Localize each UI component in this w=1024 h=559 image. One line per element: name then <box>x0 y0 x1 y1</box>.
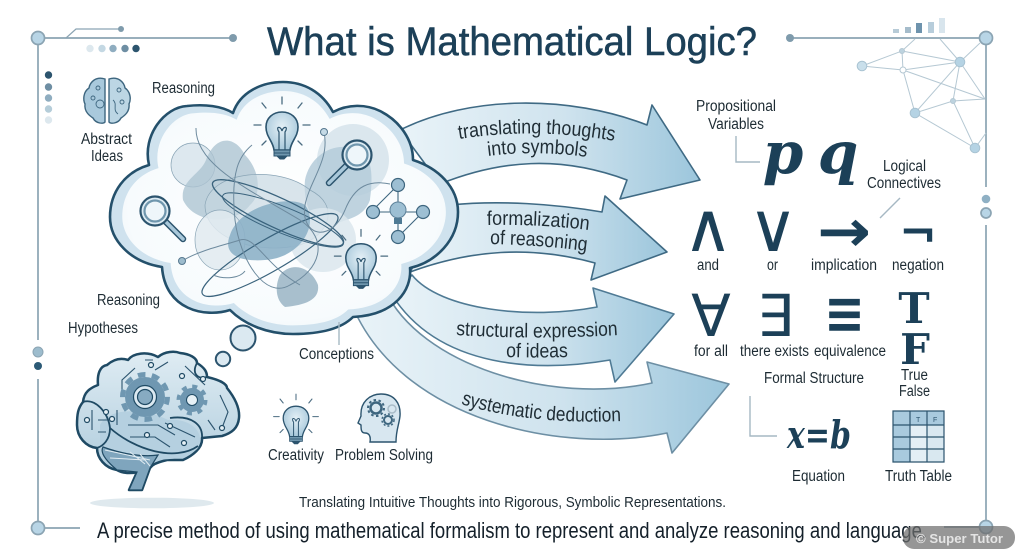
formal structure symbols: ∃ <box>757 282 793 350</box>
decorative bars <box>893 18 945 33</box>
formal structure symbols: Formal Structure <box>764 370 864 387</box>
true and false <box>898 284 930 400</box>
icon: lightbulb lower <box>334 230 388 288</box>
arrow: systematic deduction: systematic deduction <box>462 394 620 422</box>
arrow: formalization of reasoning: of reasoning <box>490 230 587 254</box>
icon: head with gears, problem solving <box>358 394 400 442</box>
cloud labels: Abstract <box>81 131 133 148</box>
icon: lightbulb top <box>254 97 310 159</box>
arrow: formalization of reasoning: formalization <box>487 210 589 230</box>
formal structure symbols <box>691 279 886 387</box>
leader lines <box>339 136 900 436</box>
icon: small brain, abstract ideas <box>84 78 130 123</box>
thought bubbles <box>216 326 256 366</box>
cloud labels: Problem Solving <box>335 447 433 464</box>
network graph <box>857 39 986 153</box>
formal structure symbols: equivalence <box>814 343 886 360</box>
cloud labels: Reasoning <box>152 80 215 97</box>
arrow: translating thoughts into symbols <box>402 102 701 200</box>
cloud labels <box>68 80 433 464</box>
true and false: False <box>899 383 930 400</box>
propositional variables <box>696 98 858 187</box>
logical connectives: Logical <box>883 158 926 175</box>
true and false: T <box>898 284 930 333</box>
logical connectives: implication <box>811 257 877 274</box>
frame: right and top border with nodes <box>786 32 992 534</box>
arrow: translating thoughts into symbols: translating thoughts <box>458 119 615 141</box>
logical connectives: Connectives <box>867 175 941 192</box>
true and false: True <box>901 367 928 384</box>
abstract blobs <box>171 124 389 307</box>
propositional variables: Propositional <box>696 98 776 115</box>
subtitle: Translating Intuitive Thoughts into Rigorous, Symbolic Representations. <box>299 494 726 511</box>
logical connectives: or <box>767 257 778 274</box>
formal structure symbols: there exists <box>740 343 809 360</box>
propositional variables: q <box>818 119 858 187</box>
icon: lightbulb, creativity <box>274 394 318 444</box>
frame: left and top border with nodes <box>32 26 237 534</box>
cloud labels: Ideas <box>91 148 123 165</box>
truth table: Truth Table <box>885 468 952 485</box>
truth table <box>885 411 952 485</box>
arrow: systematic deduction <box>357 304 730 454</box>
logical connectives: → <box>817 197 871 265</box>
arrow: translating thoughts into symbols: into symbols <box>488 139 587 158</box>
icon: network with bulb <box>366 178 430 244</box>
arrow: structural expression of ideas: structural expression <box>456 322 617 342</box>
propositional variables: p <box>763 119 803 187</box>
logical connectives: negation <box>892 257 944 274</box>
decorative dot column <box>45 71 52 124</box>
truth table: F <box>933 417 937 424</box>
arrow: formalization of reasoning <box>411 195 668 281</box>
logical connectives: ∧ <box>683 189 733 268</box>
formal structure symbols: ∀ <box>691 282 731 350</box>
brain shadow <box>90 498 214 508</box>
equation <box>786 412 851 485</box>
cloud labels: Creativity <box>268 447 324 464</box>
watermark: © Super Tutor <box>916 531 1003 546</box>
cloud labels: Hypotheses <box>68 320 138 337</box>
formal structure symbols: ≡ <box>824 279 865 347</box>
truth table: T <box>916 417 921 424</box>
gear small <box>178 386 206 414</box>
icon: magnifier left <box>140 196 183 239</box>
logical connectives: ∨ <box>748 189 798 268</box>
true and false: F <box>900 325 930 374</box>
equation: x=b <box>786 412 851 457</box>
logical connectives: and <box>697 257 719 274</box>
decorative dot row <box>86 45 140 52</box>
cloud labels: Conceptions <box>299 346 374 363</box>
arrow: structural expression of ideas: of ideas <box>506 342 568 358</box>
equation: Equation <box>792 468 845 485</box>
cloud labels: Reasoning <box>97 292 160 309</box>
gear large <box>122 374 168 420</box>
icon: magnifier right <box>329 140 372 183</box>
icon: large brain with gears <box>77 352 239 490</box>
propositional variables: Variables <box>708 116 764 133</box>
thought cloud <box>110 82 458 334</box>
arrow: structural expression of ideas <box>396 274 675 383</box>
logical connectives: ¬ <box>899 208 937 259</box>
formal structure symbols: for all <box>694 343 728 360</box>
tangled thought lines <box>178 128 390 308</box>
watermark <box>903 526 1015 549</box>
title: What is Mathematical Logic? <box>267 20 757 64</box>
logical connectives <box>683 158 944 274</box>
